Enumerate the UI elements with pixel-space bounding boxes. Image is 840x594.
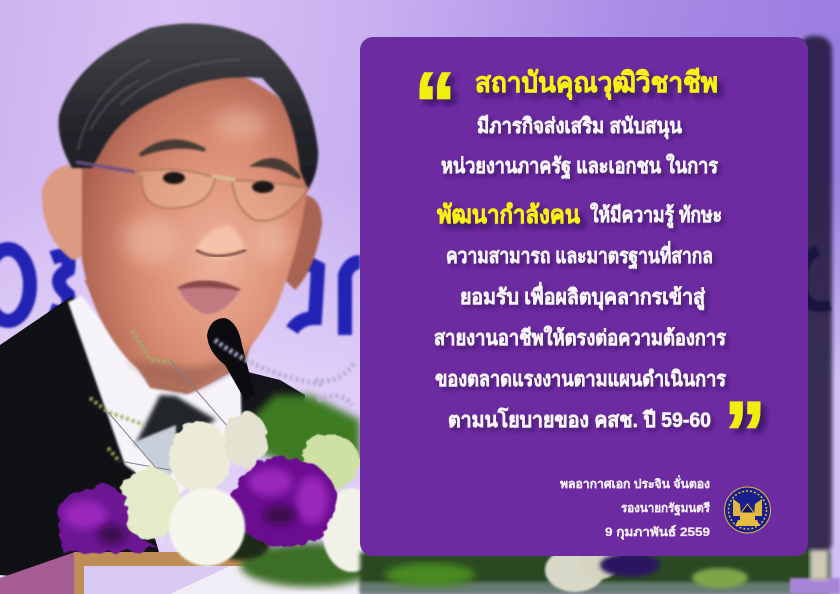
neck	[84, 280, 262, 394]
hair grey highlights	[78, 60, 240, 150]
attribution text	[560, 475, 711, 540]
jaw shadow	[128, 345, 250, 390]
quote text block: ให้มีความรู้ ทักษะ	[590, 202, 722, 229]
purple carnation: left	[58, 480, 158, 552]
suit right shoulder	[240, 370, 305, 440]
necktie	[135, 395, 216, 445]
quote text block	[434, 114, 727, 432]
white rose: right of arrangement	[322, 488, 382, 572]
white shirt collar	[68, 296, 242, 500]
purple carnation: centre	[233, 457, 337, 547]
green fern foliage	[250, 395, 360, 470]
quote text block: สายงานอาชีพให้ตรงต่อความต้องการ	[434, 325, 727, 350]
dark gap behind flowers	[210, 530, 270, 560]
suit jacket	[0, 296, 170, 590]
photo: speaker at the podium	[0, 24, 322, 590]
attribution text: 9 กุมภาพันธ์ 2559	[605, 525, 710, 540]
flower arrangement	[58, 330, 382, 587]
heading: institute name: สถาบันคุณวุฒิวิชาชีพ	[475, 67, 718, 100]
necktie lower part	[134, 425, 176, 480]
white rose: small upper right	[224, 412, 268, 468]
icon: opening quotation mark: “	[414, 55, 456, 155]
icon: government seal	[724, 487, 770, 533]
eyes	[163, 172, 274, 193]
attribution text: พลอากาศเอก ประจิน จั่นตอง	[560, 475, 710, 491]
green-white rose: right	[300, 434, 360, 490]
panel shadow: dark band right of the panel	[798, 36, 832, 556]
right ear	[285, 195, 322, 290]
quote text block: ยอมรับ เพื่อผลิตบุคลากรเข้าสู่	[460, 281, 705, 311]
eyeglasses	[76, 162, 308, 221]
white rose: upper centre	[170, 421, 230, 493]
stray dark quotation mark on photo: ”	[108, 469, 121, 499]
face	[82, 55, 308, 390]
highlighted phrase: พัฒนากำลังคน	[437, 201, 580, 229]
attribution text: รองนายกรัฐมนตรี	[621, 501, 711, 516]
thin green sprigs	[90, 330, 172, 462]
mouth	[178, 280, 240, 314]
eyebrows	[140, 141, 300, 178]
nose	[196, 225, 245, 259]
hair	[59, 24, 318, 190]
panel: quote card	[360, 37, 808, 556]
icon: closing quotation mark: ”	[724, 384, 766, 484]
microphone	[207, 318, 255, 400]
podium	[0, 552, 360, 594]
quote text block: หน่วยงานภาครัฐ และเอกชน ในการ	[441, 153, 719, 180]
foliage under flowers	[240, 543, 380, 587]
quote text block: ตามนโยบายของ คสช. ปี 59-60	[448, 407, 711, 432]
quote text block: มีภารกิจส่งเสริม สนับสนุน	[477, 114, 683, 140]
left ear	[42, 164, 88, 260]
quote text block: ของตลาดแรงงานตามแผนดำเนินการ	[435, 368, 727, 391]
green-white rose: left	[118, 467, 182, 539]
cheek highlights	[122, 109, 290, 264]
white rose: bottom centre	[169, 488, 245, 566]
backdrop: blurred blue lettering	[0, 249, 830, 335]
quote text block: ความสามารถ และมาตรฐานที่สากล	[446, 240, 713, 270]
lilac sprigs	[215, 340, 355, 405]
bottom strip of foliage and flowers below the panel	[360, 545, 840, 594]
